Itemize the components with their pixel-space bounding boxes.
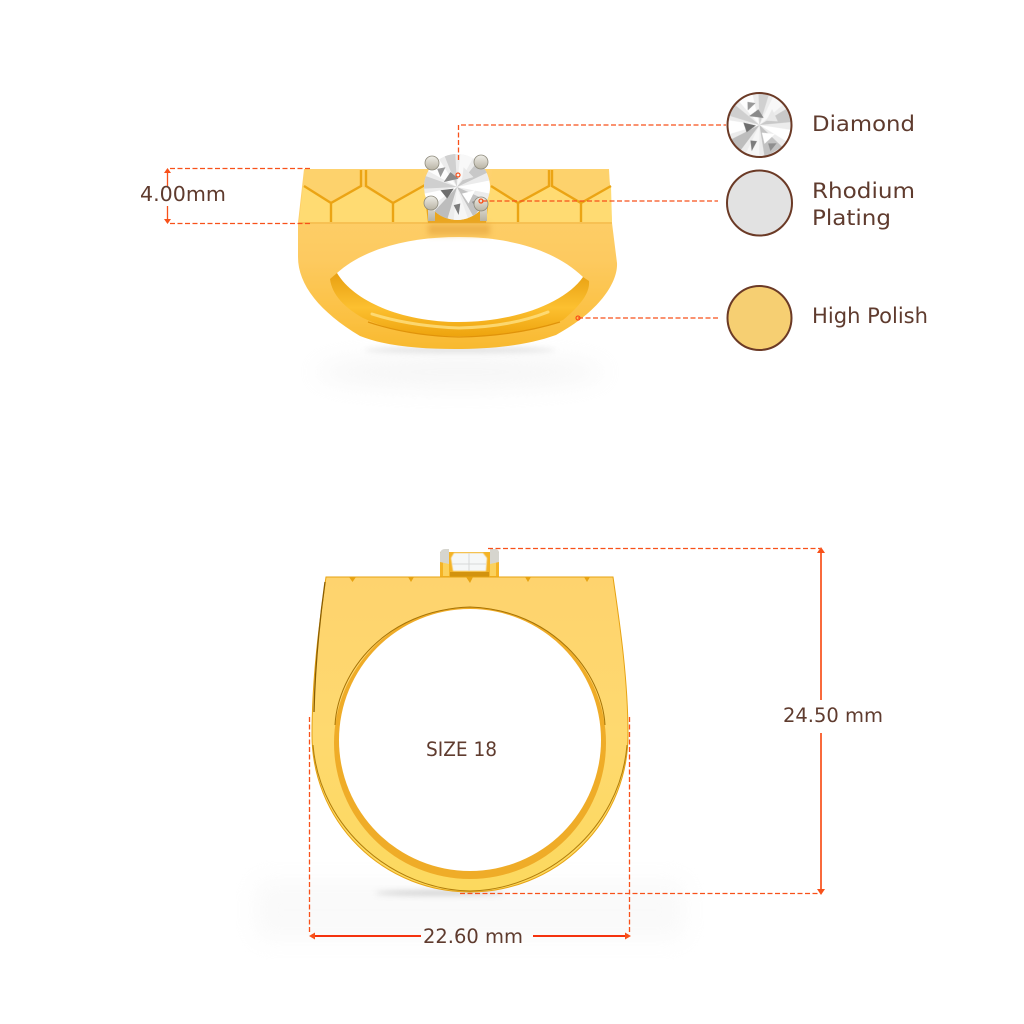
legend: diamond swatch [718, 84, 801, 166]
shank lower groove [368, 322, 560, 337]
top notches [349, 577, 590, 583]
diamond stone [424, 154, 490, 220]
dimension: width label: 22.60 mm [423, 925, 523, 948]
callout: rhodium leader [482, 200, 718, 202]
top ring shadow [315, 356, 605, 388]
left edge highlight [314, 582, 325, 712]
size label: SIZE 18 [426, 738, 497, 761]
dimension: width arrow [309, 932, 631, 940]
top ring body [298, 169, 617, 349]
diamond setting gallery [426, 206, 488, 223]
legend: diamond label: Diamond [812, 112, 915, 136]
dimension: 4.00mm label: 4.00mm [140, 182, 226, 206]
legend: polish swatch [728, 286, 792, 350]
dimension: height arrow [817, 547, 825, 895]
setting shadow [428, 224, 490, 235]
infographic: ring specification [141, 92, 926, 944]
lower outer edge line [313, 745, 627, 891]
callout: diamond leader [458, 125, 726, 160]
dimension: 4.00mm guides [170, 168, 312, 224]
inner bore line [335, 607, 605, 725]
hexagon cells [304, 170, 610, 203]
dimension: height guides [460, 548, 820, 894]
dimension: width guides [310, 717, 630, 934]
legend: plating label: Plating [812, 206, 891, 230]
markers on leaders [456, 173, 580, 320]
prong posts [428, 200, 487, 221]
dimension: height label: 24.50 mm [783, 704, 883, 727]
side ring body [312, 577, 628, 892]
shank band highlights [372, 312, 548, 328]
top ring view [298, 154, 617, 388]
hexagon groove lines [304, 170, 611, 222]
bore opening [339, 609, 601, 871]
legend: rhodium swatch [727, 170, 792, 236]
side ring shadow [255, 880, 685, 940]
side ring view [255, 549, 685, 940]
top plate lower strip [299, 186, 612, 222]
top ring contact shadow [365, 347, 555, 353]
bore wall [334, 607, 606, 879]
callout lines and dimensions [140, 125, 883, 948]
side ring head [440, 549, 499, 578]
legend: polish label: High Polish [812, 304, 928, 328]
prong tips [424, 155, 488, 211]
hole [337, 237, 583, 322]
dimension: 4.00mm arrow [164, 168, 171, 224]
plate base line [299, 222, 612, 224]
legend: rhodium label: Rhodium [812, 179, 915, 203]
inner shank band [330, 273, 589, 336]
legend [718, 84, 928, 350]
side ring contact shadow [375, 890, 505, 896]
callout: polish leader [578, 317, 718, 319]
side ring diamond [451, 553, 487, 571]
